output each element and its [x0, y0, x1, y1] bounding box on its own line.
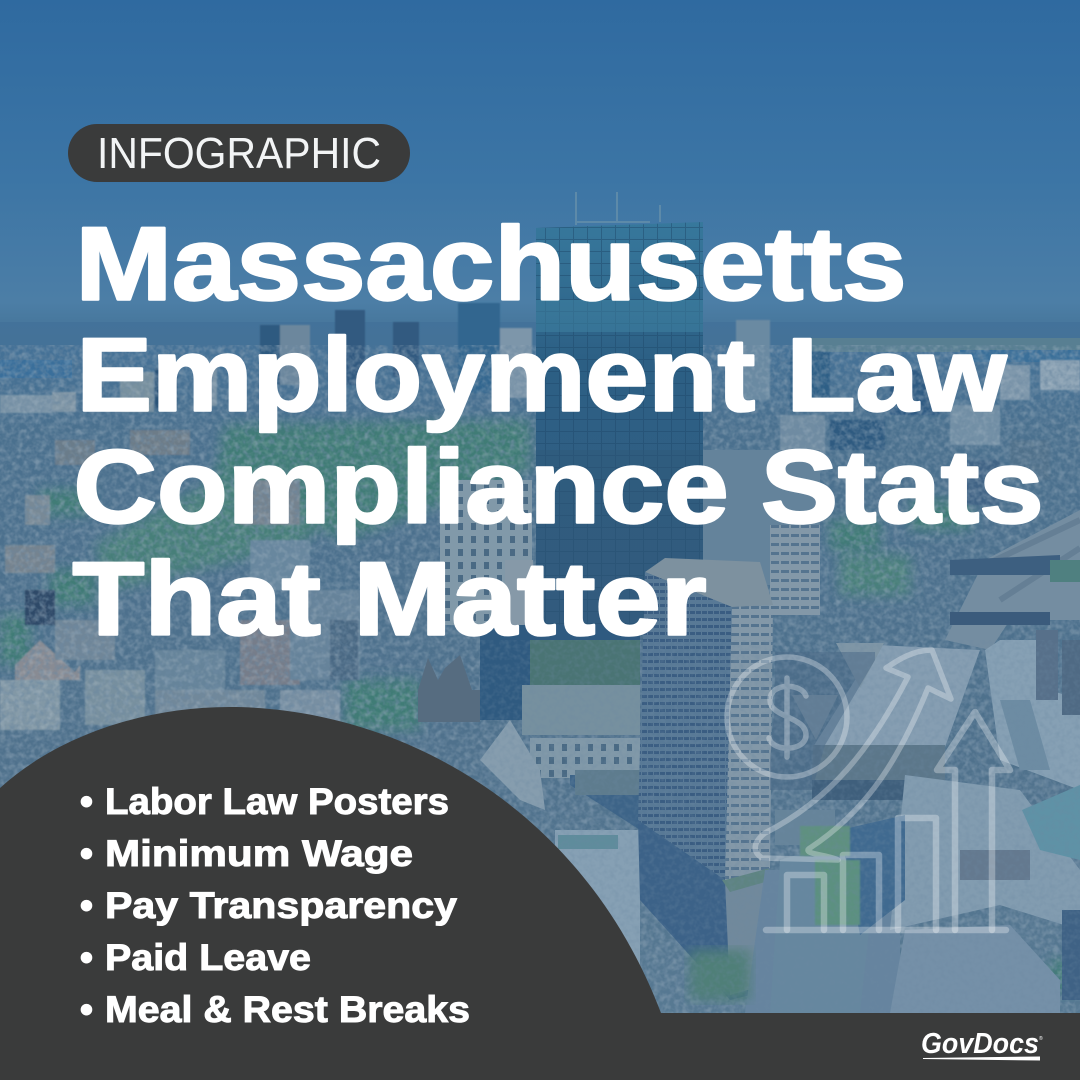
topic list: • — [80, 937, 93, 978]
rooftops to the right — [985, 640, 1080, 790]
topic list: Paid Leave — [105, 937, 311, 978]
topic list: Meal & Rest Breaks — [105, 989, 470, 1030]
topic list: • — [80, 885, 93, 926]
footer and curved panel — [0, 707, 1080, 1080]
title: Compliance Stats — [74, 430, 1044, 546]
building: grid high-rise — [638, 558, 773, 880]
mid towers beside Hancock — [440, 480, 532, 625]
topic list — [80, 781, 470, 1030]
logo: GovDocs: GovDocs — [921, 1028, 1039, 1060]
highway — [945, 510, 1080, 650]
topic list: • — [80, 833, 93, 874]
city texture — [0, 345, 1080, 1025]
row houses and blocks — [0, 430, 360, 730]
block: low hotel — [522, 685, 640, 735]
roadway and street — [745, 870, 900, 1013]
topic list: Pay Transparency — [105, 885, 457, 926]
background: sky — [0, 0, 1080, 325]
logo: GovDocs: ® — [1039, 1035, 1043, 1042]
topic list: Labor Law Posters — [105, 781, 449, 822]
icon: dollar and growth chart outline — [727, 650, 1010, 930]
topic list: • — [80, 781, 93, 822]
topic list: • — [80, 989, 93, 1030]
title: Massachusetts — [76, 206, 906, 322]
badge: infographic: INFOGRAPHIC — [97, 129, 381, 178]
background: aerial city view — [0, 192, 1080, 1042]
icon: dollar coin — [727, 657, 847, 777]
icon: ascending bars — [766, 712, 1010, 930]
downtown skyline — [0, 303, 1080, 505]
title: Employment Law — [76, 318, 1008, 434]
fine texture on lower blocks — [480, 640, 1080, 1015]
building: Hancock glass tower — [536, 222, 703, 625]
title: That Matter — [72, 542, 706, 658]
building: parking garage — [813, 645, 980, 747]
building: Trinity church — [418, 655, 480, 722]
parks and trees — [0, 420, 1080, 990]
block: pale roof — [555, 830, 640, 1000]
block: lower facade — [638, 820, 770, 1000]
title — [72, 206, 1044, 658]
topic list: Minimum Wage — [105, 833, 413, 874]
arrow: rising swoosh — [755, 650, 951, 860]
water and airfield on the horizon — [0, 360, 72, 378]
